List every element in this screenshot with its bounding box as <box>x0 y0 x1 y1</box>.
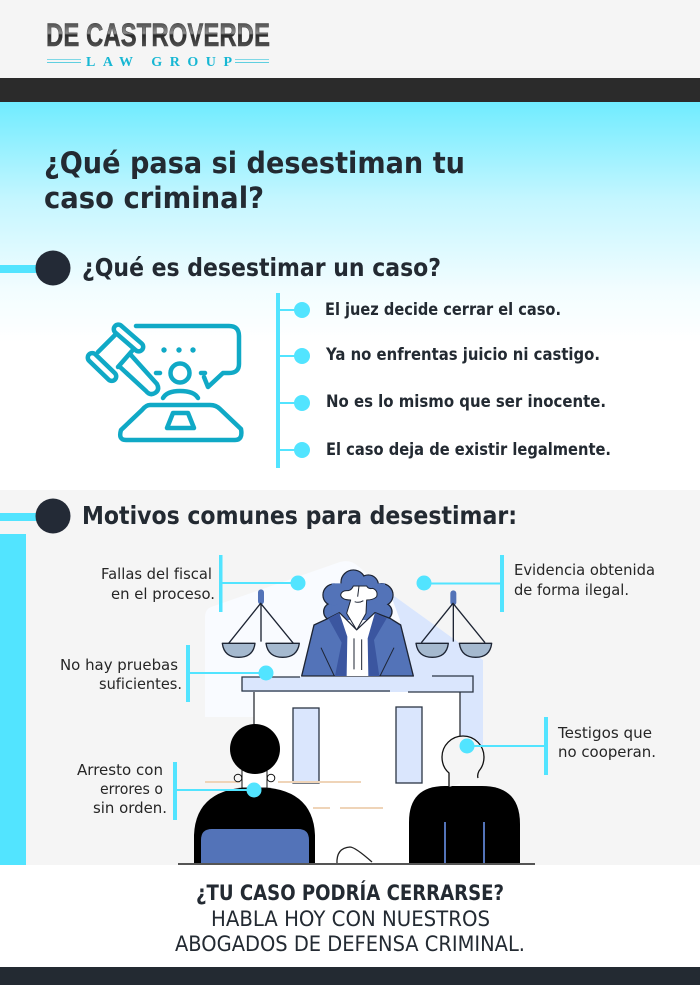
callout: fallas del fiscal: en el proceso. <box>111 585 215 603</box>
header band <box>0 0 700 102</box>
bullet list <box>276 293 611 468</box>
title: ¿Qué pasa si desestiman tu <box>44 146 465 180</box>
title: caso criminal? <box>44 181 264 215</box>
logo: DE CASTROVERDE <box>46 17 270 53</box>
section heading: motivos comunes: Motivos comunes para desestimar: <box>82 501 517 530</box>
section heading: que es desestimar: ¿Qué es desestimar un caso? <box>82 253 441 282</box>
callout: evidencia ilegal: de forma ilegal. <box>514 581 629 599</box>
table lines <box>205 781 383 809</box>
left accent bar <box>0 534 26 865</box>
callout: testigos: Testigos que <box>557 724 652 742</box>
title <box>44 146 465 215</box>
gradient backdrop <box>0 102 700 342</box>
callout: evidencia ilegal <box>416 555 655 612</box>
callout: fallas del fiscal <box>101 555 306 612</box>
callout: arresto: Arresto con <box>77 761 163 779</box>
logo: LAW GROUP <box>86 55 232 70</box>
call to action: HABLA HOY CON NUESTROS <box>211 907 490 932</box>
callout: arresto <box>77 761 262 820</box>
floor and bag <box>178 847 535 865</box>
call to action <box>175 880 525 957</box>
callout: arresto: errores o <box>100 780 163 798</box>
callout: no hay pruebas: suficientes. <box>99 675 182 693</box>
panel: motivos comunes background <box>0 490 700 865</box>
callout: no hay pruebas <box>60 645 274 702</box>
bullet 4: El caso deja de existir legalmente. <box>326 440 611 459</box>
icon: gavel and judge speech bubble <box>86 323 241 440</box>
call to action: ¿TU CASO PODRÍA CERRARSE? <box>196 880 504 906</box>
section heading: que es desestimar <box>0 250 441 286</box>
courtroom illustration <box>178 561 535 865</box>
bullet 2: Ya no enfrentas juicio ni castigo. <box>325 345 600 364</box>
logo <box>46 17 270 70</box>
callout: evidencia ilegal: Evidencia obtenida <box>514 561 655 579</box>
bullet 3: No es lo mismo que ser inocente. <box>326 392 606 411</box>
lawyer figure <box>409 736 520 864</box>
bullet 1: El juez decide cerrar el caso. <box>325 300 561 319</box>
footer band <box>0 967 700 985</box>
callout: arresto: sin orden. <box>93 799 167 817</box>
defendant figure <box>194 724 315 864</box>
judge bench <box>242 676 473 692</box>
judge figure and scales <box>222 570 492 676</box>
callout: no hay pruebas: No hay pruebas <box>60 656 178 674</box>
callout: testigos <box>460 717 656 775</box>
section heading: motivos comunes <box>0 498 517 534</box>
callout: fallas del fiscal: Fallas del fiscal <box>101 565 212 583</box>
call to action: ABOGADOS DE DEFENSA CRIMINAL. <box>175 932 525 957</box>
callout: testigos: no cooperan. <box>558 743 656 761</box>
